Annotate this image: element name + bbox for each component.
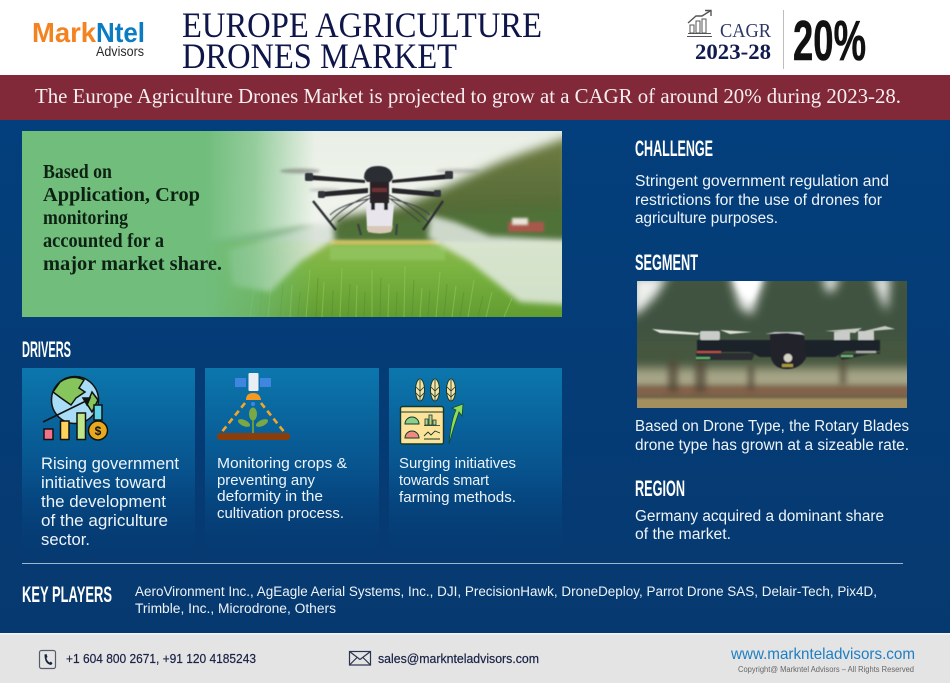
icon: satellite monitoring crop (217, 373, 290, 440)
panel: challenge: agriculture purposes. (635, 210, 778, 227)
driver 2 text: Monitoring crops & (217, 455, 347, 472)
logo: MarkNtel Advisors: Ntel (96, 17, 145, 48)
driver 3 text: farming methods. (399, 489, 516, 506)
driver 3 text: towards smart (399, 472, 490, 489)
driver 2 text: deformity in the (217, 488, 323, 505)
icon: globe and bar chart (43, 376, 108, 440)
hero text: monitoring (43, 208, 128, 229)
hero text (43, 162, 222, 275)
driver 1 text: the development (41, 493, 166, 511)
copyright: Copyright@ Markntel Advisors – All Rights Reserved (738, 665, 914, 674)
driver 1 text: Rising government (41, 455, 179, 473)
panel: segment: Based on Drone Type, the Rotary Blades (635, 418, 909, 435)
panel: challenge: CHALLENGE (635, 136, 713, 161)
panel: key players: AeroVironment Inc., AgEagle Aerial Systems, Inc., DJI, PrecisionHawk, DroneDeploy, Parrot Drone SAS, Delair-Tech, Pix4D, (135, 584, 877, 599)
driver 1 text: initiatives toward (41, 474, 166, 492)
title (182, 5, 542, 76)
logo: MarkNtel Advisors (32, 17, 145, 59)
panel: challenge: restrictions for the use of drones for (635, 192, 882, 209)
hero text: major market share. (43, 254, 222, 275)
panel: application hero image (22, 131, 570, 322)
panel: key players (22, 582, 877, 616)
segment photo: quadcopter (637, 281, 907, 408)
driver 1 text (41, 455, 179, 549)
banner (0, 75, 950, 120)
banner: The Europe Agriculture Drones Market is projected to grow at a CAGR of around 20% during 2023-28. (35, 84, 901, 108)
divider (783, 10, 784, 69)
CAGR label (695, 20, 771, 64)
panel: challenge (635, 136, 889, 227)
header background (0, 0, 950, 76)
panel: driver 1: $ (95, 424, 102, 438)
panel: region: of the market. (635, 526, 731, 543)
driver 2 text (217, 455, 347, 522)
panel: driver 3 (389, 368, 562, 562)
CAGR value: 20% (793, 9, 866, 73)
panel: segment (625, 250, 920, 454)
CAGR label: CAGR (720, 20, 771, 42)
main blue background (0, 120, 950, 633)
hero text: Based on (43, 162, 112, 183)
icon: smart farming dashboard (400, 379, 463, 444)
panel: region: Germany acquired a dominant share (635, 508, 884, 525)
footer (0, 633, 950, 683)
panel: key players: Trimble, Inc., Microdrone, Others (135, 601, 336, 616)
panel: segment: SEGMENT (635, 250, 698, 275)
icon: phone (40, 650, 56, 668)
title: EUROPE AGRICULTURE (182, 5, 542, 45)
driver 3 text: Surging initiatives (399, 455, 516, 472)
panel: challenge: Stringent government regulation and (635, 173, 889, 190)
phone numbers: +1 604 800 2671, +91 120 4185243 (66, 652, 256, 666)
panel: region (635, 476, 884, 543)
panel: region: REGION (635, 476, 685, 501)
driver 2 text: preventing any (217, 472, 315, 489)
panel: driver 1 (22, 368, 195, 562)
driver 1 text: sector. (41, 531, 90, 549)
hero text: accounted for a (43, 231, 164, 252)
CAGR label: 2023-28 (695, 39, 771, 64)
email: sales@marknteladvisors.com (378, 652, 539, 666)
logo: MarkNtel Advisors: Mark (32, 17, 96, 48)
driver 1 text: of the agriculture (41, 512, 168, 530)
icon: spraying drone (280, 166, 480, 235)
panel: driver 2 (205, 368, 379, 562)
panel: segment: drone type has grown at a sizeable rate. (635, 437, 909, 454)
logo: MarkNtel Advisors: Advisors (96, 44, 144, 59)
website: www.marknteladvisors.com (730, 646, 915, 663)
hero text: Application, Crop (43, 185, 200, 206)
heading: drivers: DRIVERS (22, 337, 71, 362)
title: DRONES MARKET (182, 36, 457, 76)
driver 3 text (399, 455, 516, 506)
panel: key players: KEY PLAYERS (22, 582, 112, 607)
icon: growth chart (687, 10, 712, 36)
driver 2 text: cultivation process. (217, 505, 344, 522)
icon: mail (350, 652, 370, 665)
